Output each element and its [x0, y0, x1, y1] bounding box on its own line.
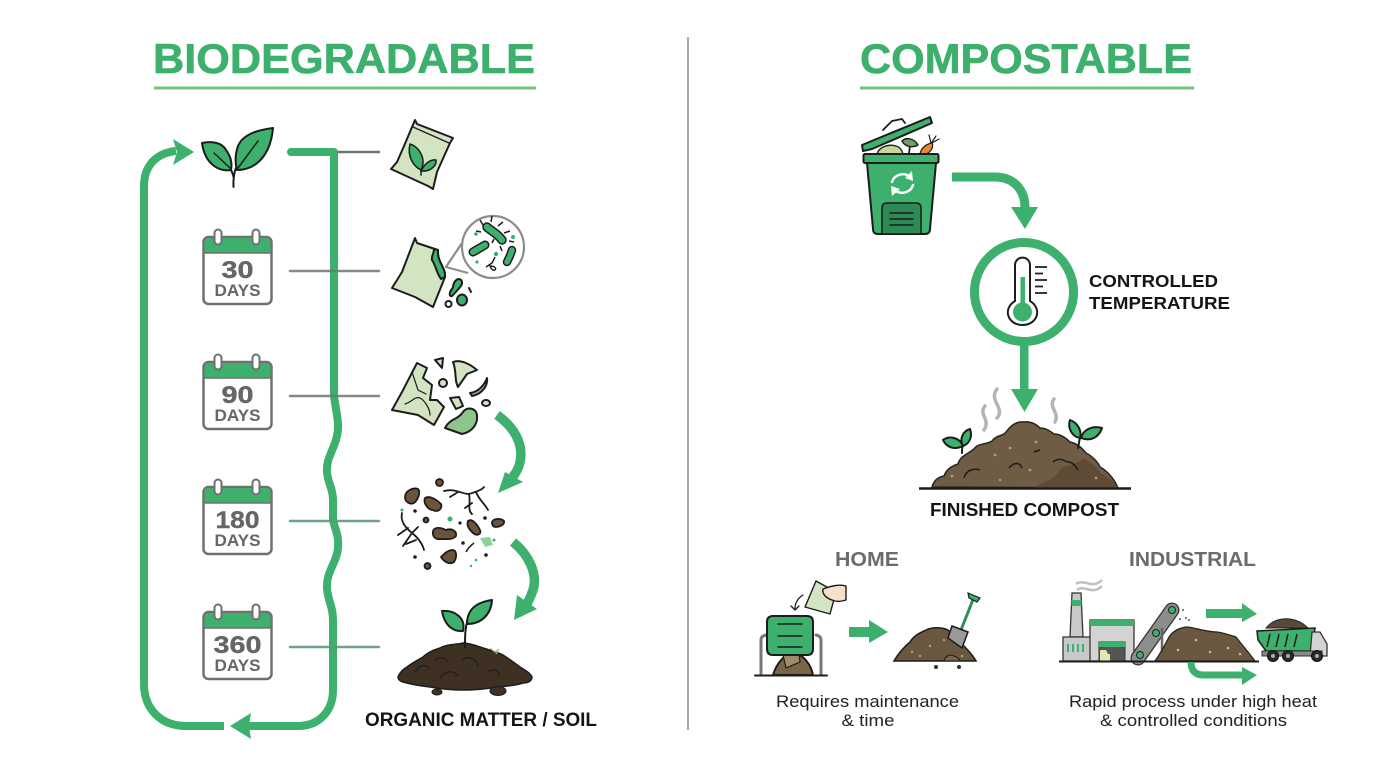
icon: calendar 180 days: DAYS	[214, 532, 260, 550]
lifecycle loop arrow	[144, 139, 338, 739]
icon: calendar 360 days: DAYS	[214, 657, 260, 675]
icon: calendar 30 days: DAYS	[214, 282, 260, 300]
text: home note: Requires maintenance	[776, 693, 959, 711]
icon: thermometer circle	[974, 242, 1074, 342]
icon: home tumbler	[755, 581, 846, 676]
icon: pile and shovel	[894, 593, 980, 669]
label: controlled temperature	[1089, 271, 1230, 313]
icon: decomposed debris	[398, 479, 504, 569]
icon: compost bin	[862, 117, 939, 234]
icon: soil pile with seedling	[398, 600, 532, 696]
arrow: tumbler to pile	[849, 620, 888, 643]
icon: calendar 180 days	[204, 480, 272, 554]
timeline connector lines	[290, 152, 379, 647]
label: finished compost: FINISHED COMPOST	[930, 500, 1119, 520]
icon: intact bag	[391, 120, 453, 189]
icon: calendar 30 days: 30	[222, 257, 254, 284]
icon: dump truck	[1257, 619, 1327, 662]
arrow: bin to temperature	[952, 177, 1038, 229]
icon: finished compost pile	[919, 420, 1131, 488]
label: controlled temperature: TEMPERATURE	[1089, 293, 1230, 313]
icon: calendar 360 days: 360	[214, 632, 262, 659]
text: home note	[776, 693, 959, 730]
label: controlled temperature: CONTROLLED	[1089, 271, 1218, 291]
text: industrial note: Rapid process under high heat	[1069, 693, 1317, 711]
icon: calendar 90 days	[204, 354, 272, 429]
icon: composting plant	[1059, 580, 1259, 662]
text: home note: & time	[842, 712, 894, 730]
icon: calendar 90 days: 90	[222, 382, 254, 409]
icon: calendar 90 days: DAYS	[214, 407, 260, 425]
icon: sprout	[202, 128, 273, 187]
arrow: plant upper output	[1206, 603, 1257, 622]
label: organic matter / soil: ORGANIC MATTER / SOIL	[365, 710, 597, 731]
arrow: debris to soil	[513, 542, 537, 620]
icon: calendar 180 days: 180	[216, 507, 260, 534]
arrow: fragments to debris	[497, 415, 523, 493]
heading: home: HOME	[835, 549, 899, 571]
icon: calendar 360 days	[204, 604, 272, 679]
title: compostable: COMPOSTABLE	[860, 35, 1192, 82]
text: industrial note	[1069, 693, 1317, 730]
arrow: plant lower output	[1191, 662, 1257, 685]
title: biodegradable: BIODEGRADABLE	[153, 35, 535, 82]
heading: industrial: INDUSTRIAL	[1129, 549, 1256, 571]
icon: fragmenting bag	[392, 358, 490, 434]
icon: steam	[983, 389, 1056, 430]
text: industrial note: & controlled conditions	[1100, 712, 1287, 730]
icon: bag with microbes	[392, 216, 524, 307]
icon: calendar 30 days	[204, 230, 272, 304]
arrow: temperature to compost	[1011, 345, 1038, 412]
